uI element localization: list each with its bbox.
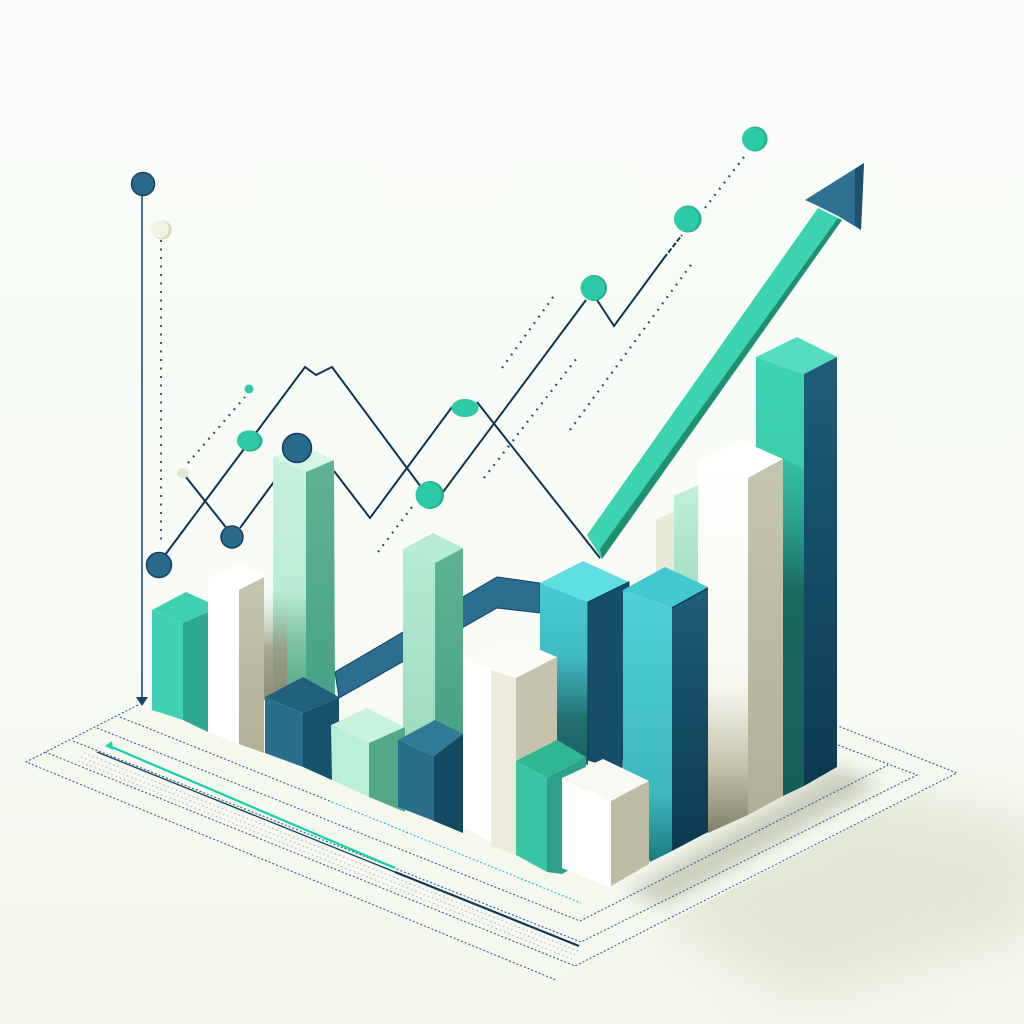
bar: cyan back xyxy=(540,561,629,770)
bar: white large center xyxy=(463,638,557,855)
bar: white short xyxy=(208,564,264,753)
dotted guides xyxy=(188,153,747,552)
bar: tall teal right xyxy=(756,337,837,796)
dotted vertical guide xyxy=(151,220,172,546)
floor dotted grid lines xyxy=(26,705,957,980)
data points xyxy=(146,126,768,578)
bar: teal short xyxy=(152,592,208,732)
bar: big white right xyxy=(698,440,783,833)
bar: dark blue small xyxy=(265,677,339,780)
ribbon band xyxy=(335,577,540,698)
bar: mid pale green xyxy=(403,533,463,740)
bar: pale green small xyxy=(331,708,405,812)
floor arrow lines xyxy=(97,741,579,946)
bar: pale green back xyxy=(674,485,698,600)
bar: green small front xyxy=(516,740,586,874)
bar: cyan front xyxy=(623,567,708,862)
rising arrow xyxy=(587,163,864,559)
bar: tall pale green xyxy=(264,447,335,700)
bar: blue small xyxy=(398,720,463,833)
soft ground shadow xyxy=(650,775,1024,1000)
line chart: main series xyxy=(165,235,682,558)
bar: white small front xyxy=(562,759,649,888)
vertical axis with arrow xyxy=(132,172,154,706)
floor platform xyxy=(26,705,957,980)
bar: beige back xyxy=(656,511,675,590)
